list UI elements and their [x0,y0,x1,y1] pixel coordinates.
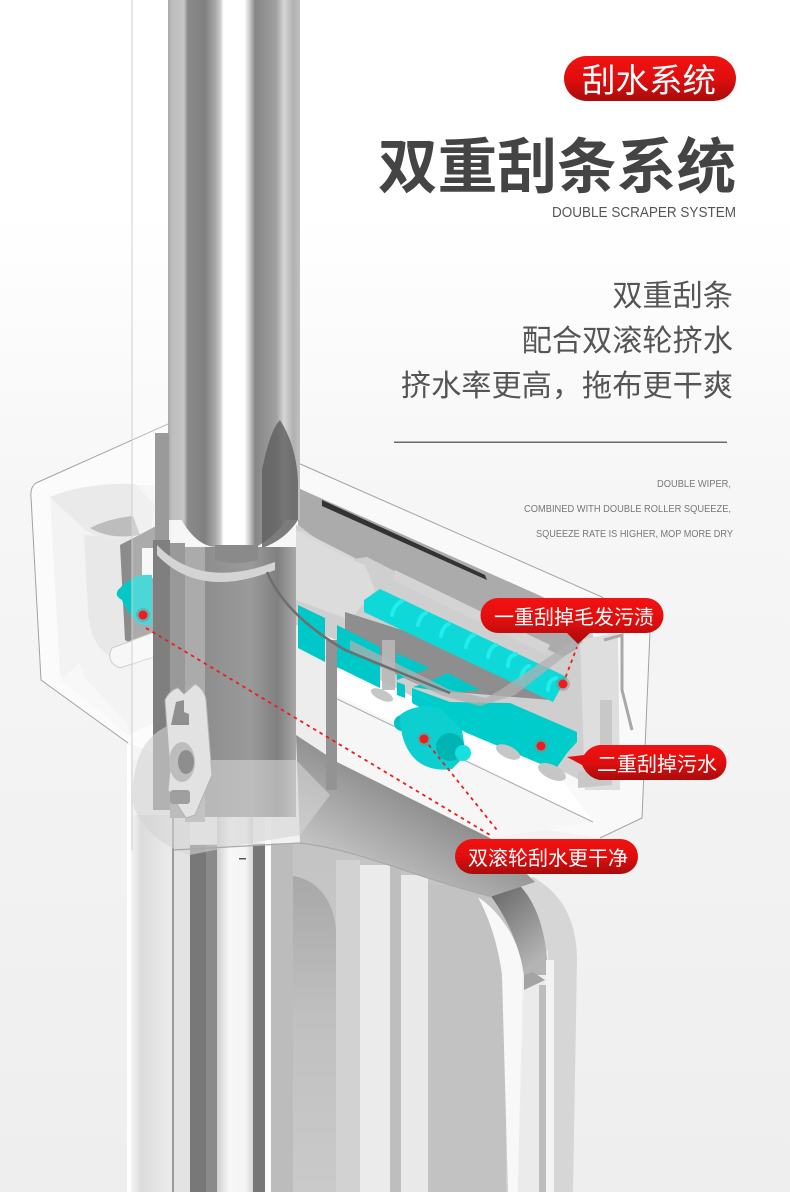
english description [524,479,733,540]
upper pole [155,0,300,548]
callout: first scraper [481,598,664,644]
english subtitle: DOUBLE SCRAPER SYSTEM [552,205,736,221]
english description: COMBINED WITH DOUBLE ROLLER SQUEEZE, [524,504,731,515]
marker dots [136,608,570,753]
english description: DOUBLE WIPER, [657,479,731,490]
teal roller left [117,575,152,625]
english description: SQUEEZE RATE IS HIGHER, MOP MORE DRY [536,529,733,540]
teal blocks [298,589,583,790]
category pill [564,56,736,101]
callout: second scraper: 二重刮掉污水 [597,753,717,776]
plate top edge [173,843,490,896]
housing left [31,424,172,760]
description text [401,279,733,403]
callout: double roller: 双滚轮刮水更干净 [468,847,628,870]
lower pole [172,817,271,1192]
description text: 双重刮条 [612,279,733,313]
description text: 挤水率更高，拖布更干爽 [401,369,733,403]
callout: second scraper [567,745,726,780]
teal roller right [394,707,471,770]
housing right box [296,463,650,838]
lower pole sleeve [153,540,296,822]
title: 双重刮条系统 [378,134,736,201]
mop plate [127,745,577,1192]
divider [394,442,727,443]
collar base [133,725,330,855]
clear pipe sleeve [132,0,168,850]
description text: 配合双滚轮挤水 [522,324,733,358]
dotted lead lines [146,628,577,835]
callout: double roller [455,839,638,874]
hinge clip [165,684,212,818]
callout: first scraper: 一重刮掉毛发污渍 [494,606,654,629]
category pill: 刮水系统 [582,62,716,99]
curved pipe [267,572,450,693]
lower dark band [296,735,535,897]
